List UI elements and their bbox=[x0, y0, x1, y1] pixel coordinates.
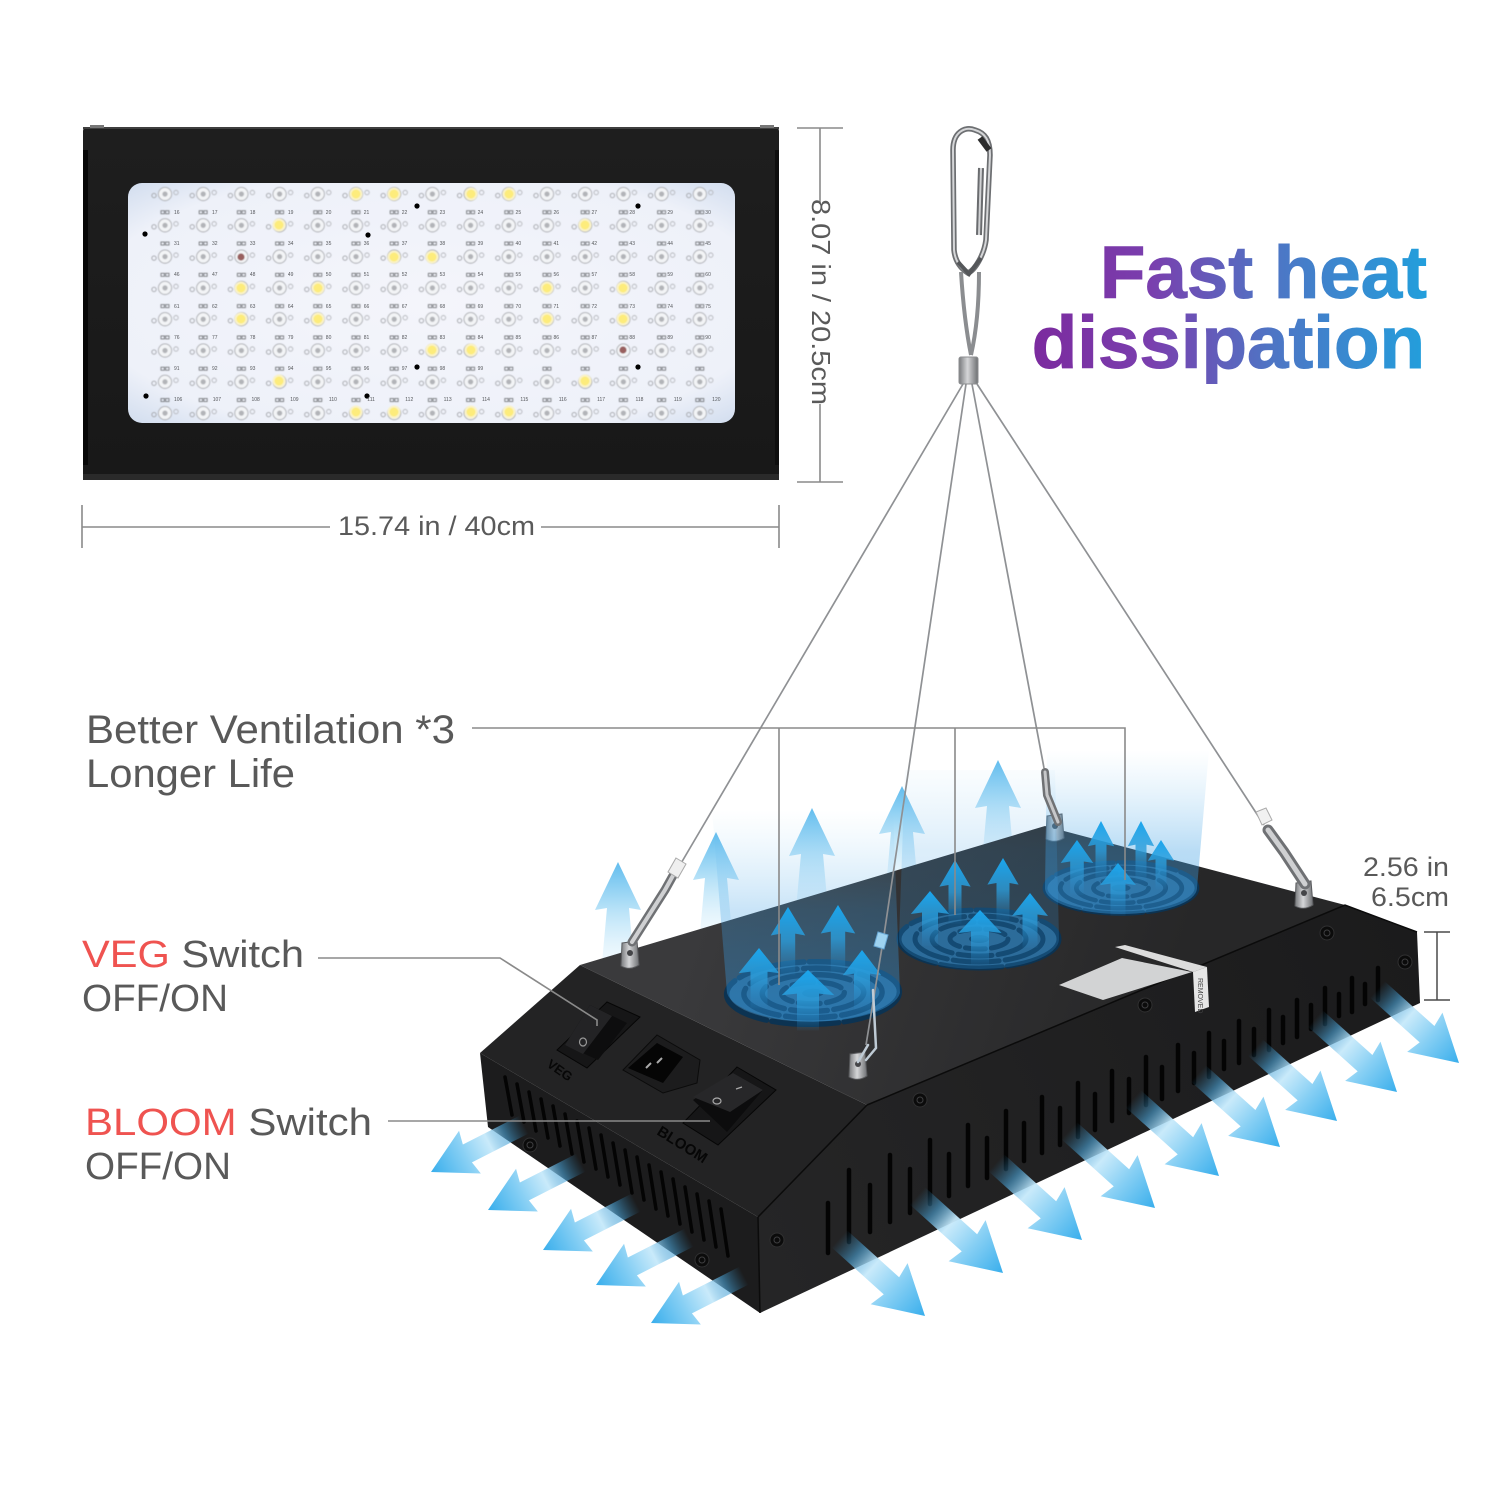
left end face bbox=[480, 1053, 760, 1313]
height label: 8.07 in / 20.5cm bbox=[806, 199, 836, 405]
label: VEG switch bbox=[82, 934, 304, 1020]
wire ferrule bbox=[959, 357, 978, 384]
fan 2 bbox=[899, 909, 1059, 969]
BLOOM marking: BLOOM bbox=[654, 1123, 710, 1167]
front clasp bbox=[858, 932, 888, 1062]
long front face bbox=[758, 905, 1420, 1313]
black mounting dots bbox=[142, 203, 641, 399]
left vent slots bbox=[505, 1077, 728, 1256]
sloped control face bbox=[480, 965, 867, 1217]
label: ventilation: Better Ventilation *3 bbox=[86, 708, 455, 752]
depth label: 6.5cm bbox=[1371, 882, 1449, 912]
left side airflow arrows bbox=[420, 1103, 755, 1344]
upward arrows from fans bbox=[739, 821, 1174, 1030]
title: dissipation bbox=[1032, 301, 1425, 384]
VEG marking: VEG bbox=[544, 1056, 575, 1084]
width label: 15.74 in / 40cm bbox=[338, 511, 535, 541]
front vent slots bbox=[828, 968, 1378, 1253]
width dimension bbox=[82, 505, 779, 548]
mounting lugs bbox=[621, 814, 1313, 1079]
lamp body bbox=[480, 814, 1420, 1313]
title: Fast heat bbox=[1100, 231, 1427, 314]
LED numbers: 76 77 78 79 80 81 82 83 84 85 86 87 88 89 90 bbox=[174, 335, 711, 341]
screws bbox=[523, 926, 1412, 1267]
label: ventilation: Longer Life bbox=[86, 752, 295, 796]
front side airflow arrows bbox=[821, 970, 1477, 1337]
label: BLOOM switch bbox=[85, 1102, 372, 1188]
top face bbox=[580, 826, 1345, 1105]
LED grid bbox=[146, 183, 719, 423]
LED panel front view bbox=[83, 125, 779, 480]
black metal frame bbox=[83, 125, 779, 480]
LED array bbox=[146, 183, 719, 423]
LED numbers: 46 47 48 49 50 51 52 53 54 55 56 57 58 59 60 bbox=[174, 272, 711, 278]
power socket bbox=[623, 1035, 700, 1093]
LED numbers: 91 92 93 94 95 96 97 98 99 bbox=[174, 366, 483, 372]
depth dimension bbox=[1363, 852, 1450, 1000]
fan light beams bbox=[712, 750, 1209, 1022]
right clasp bbox=[1256, 808, 1305, 884]
LED numbers: 16 17 18 19 20 21 22 23 24 25 26 27 28 29 30 bbox=[174, 210, 711, 216]
height dimension bbox=[797, 128, 843, 482]
LED window bbox=[128, 183, 735, 423]
label: ventilation bbox=[86, 708, 455, 796]
rating label bbox=[1059, 945, 1209, 1013]
back clasp bbox=[1045, 772, 1058, 822]
label: BLOOM switch: OFF/ON bbox=[85, 1146, 231, 1188]
wire clasps bbox=[632, 772, 1305, 1062]
LED numbers: 106 107 108 109 110 111 112 113 114 115 116 117 118 119 120 bbox=[174, 397, 721, 403]
depth label: 2.56 in bbox=[1363, 852, 1449, 882]
fan 1 bbox=[726, 960, 900, 1026]
label: BLOOM switch: BLOOM Switch bbox=[85, 1102, 372, 1144]
title bbox=[1032, 231, 1427, 384]
VEG rocker switch bbox=[557, 1002, 640, 1068]
LED numbers: 61 62 63 64 65 66 67 68 69 70 71 72 73 74 75 bbox=[174, 304, 711, 310]
upward airflow arrows behind the lamp bbox=[595, 760, 1021, 974]
LED numbers: 31 32 33 34 35 36 37 38 39 40 41 42 43 44 45 bbox=[174, 241, 711, 247]
leader lines bbox=[318, 728, 1125, 1121]
label: VEG switch: VEG Switch bbox=[82, 934, 304, 976]
fan 3 bbox=[1045, 862, 1197, 914]
label: VEG switch: OFF/ON bbox=[82, 978, 228, 1020]
LED numbers bbox=[174, 210, 721, 403]
left clasp bbox=[632, 858, 686, 942]
rating label: REMOVED bbox=[1196, 978, 1203, 1013]
BLOOM rocker switch bbox=[683, 1067, 776, 1145]
hanging wires bbox=[680, 384, 1264, 1045]
depth label bbox=[1363, 852, 1449, 912]
carabiner bbox=[953, 129, 990, 384]
yellow LEDs bbox=[236, 188, 628, 418]
red LEDs bbox=[237, 253, 627, 354]
